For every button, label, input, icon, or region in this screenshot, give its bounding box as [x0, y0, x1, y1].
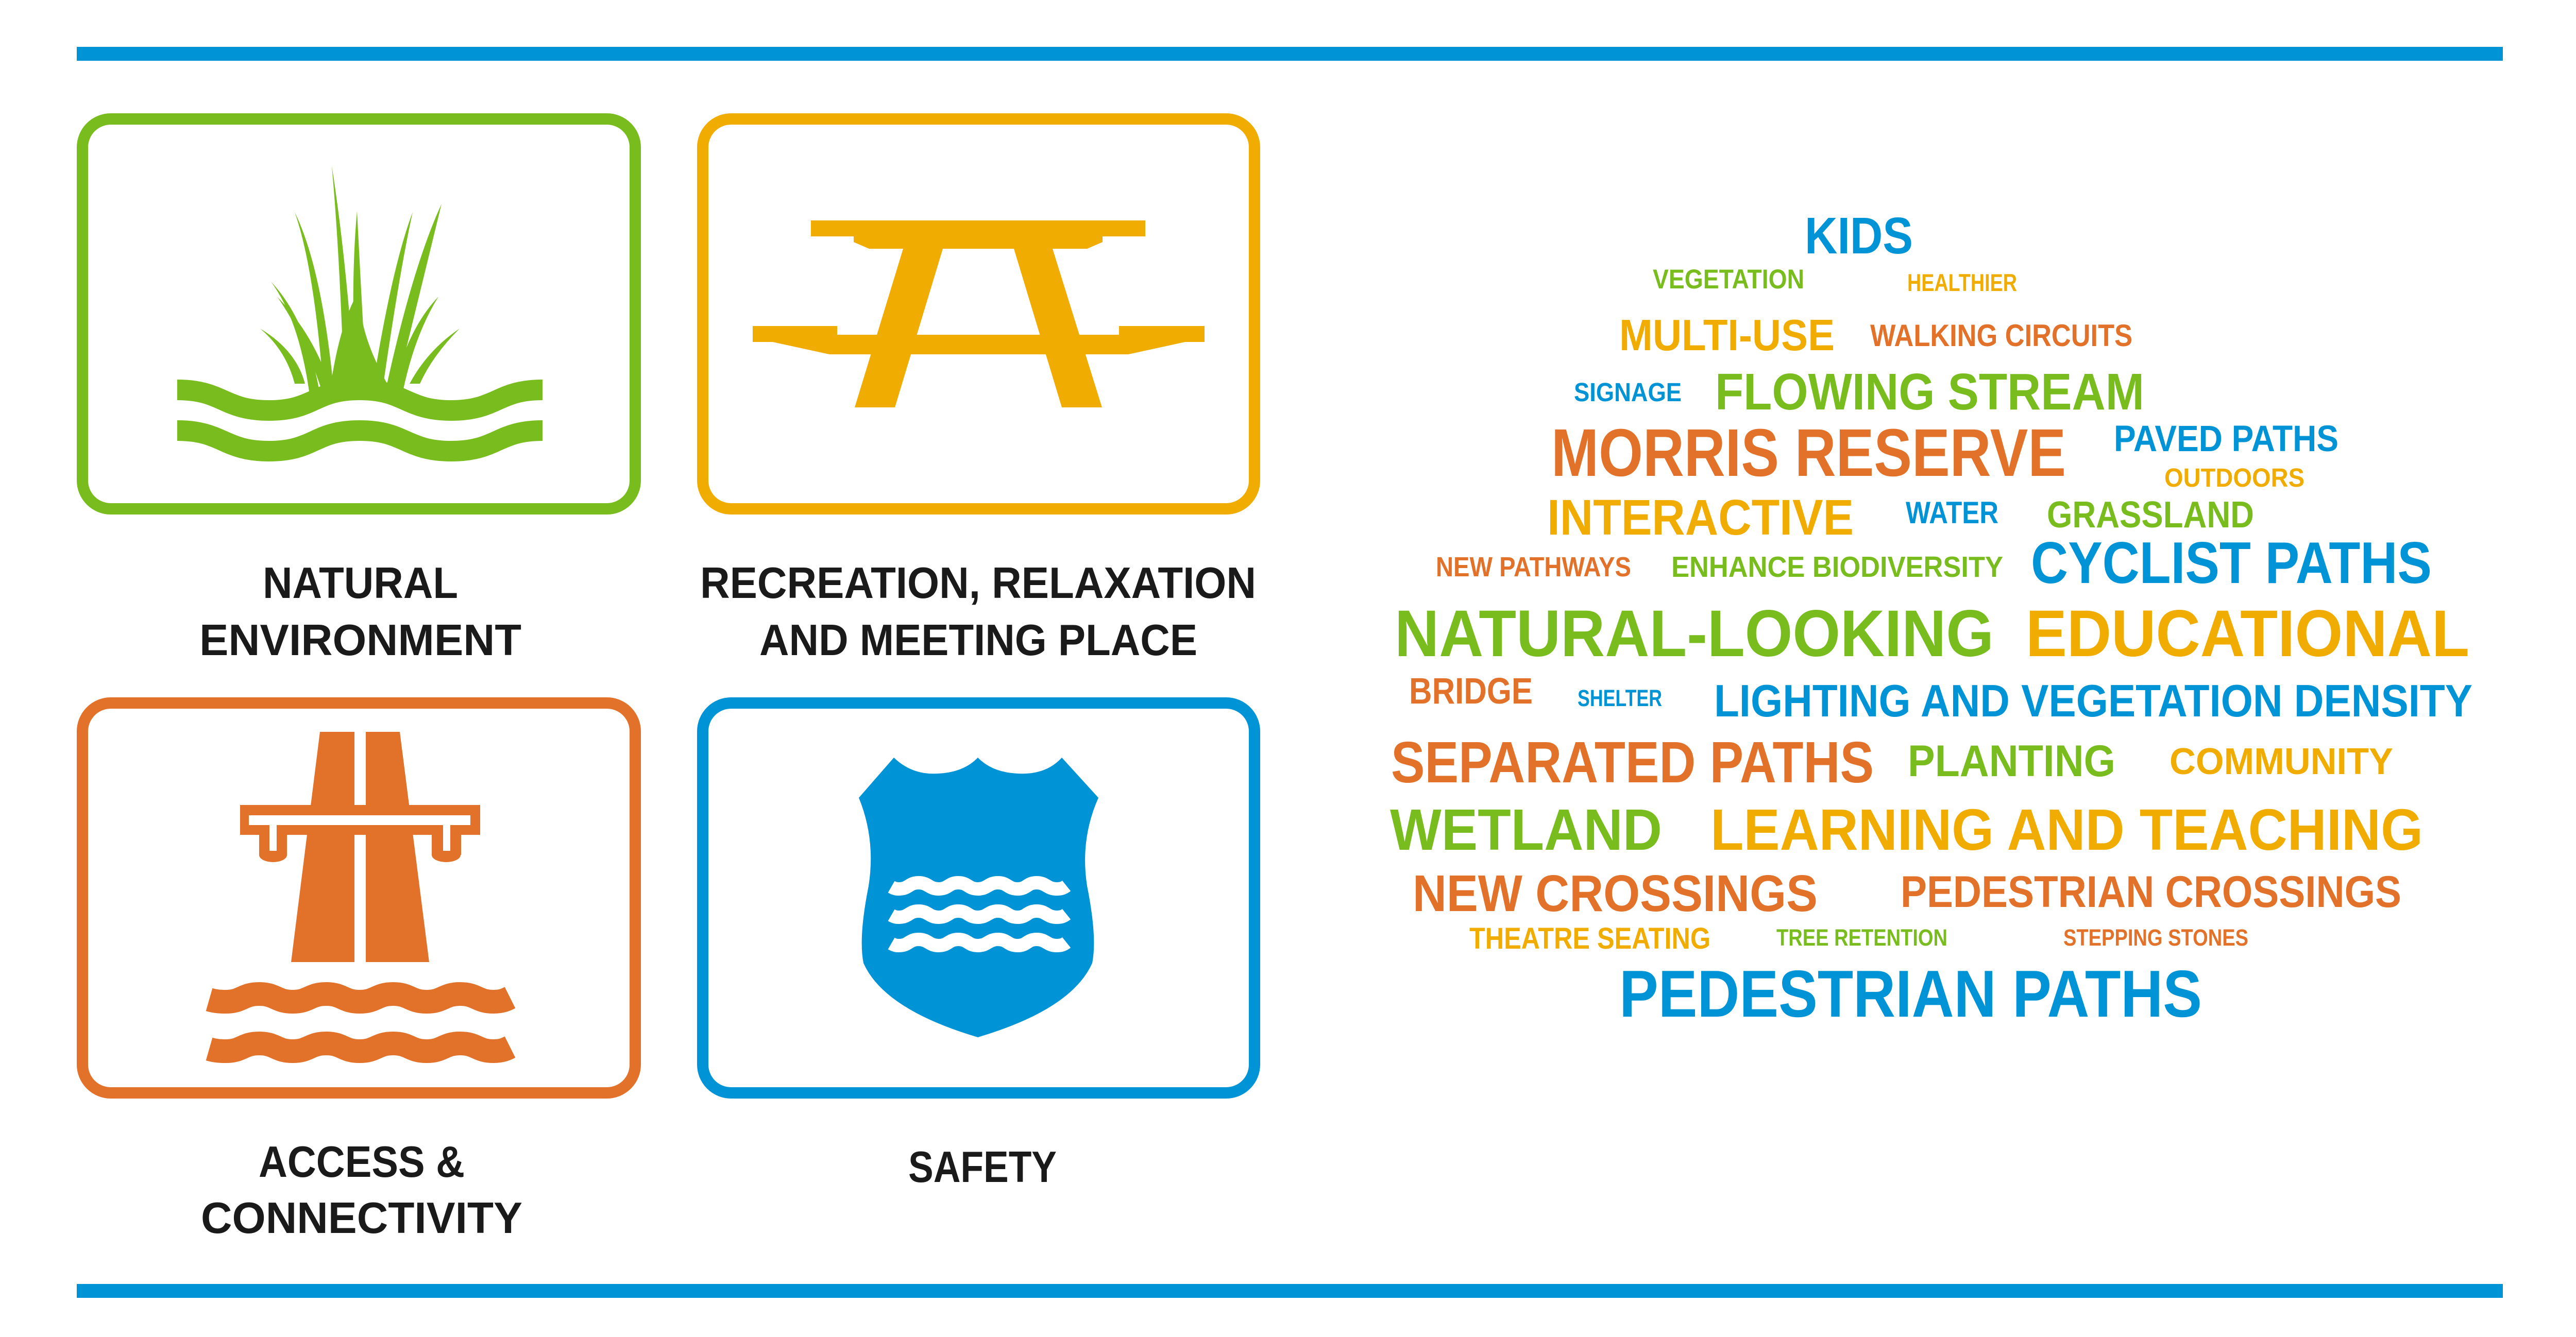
label: recreation: RECREATION, RELAXATION	[700, 559, 1256, 608]
word: walking circuits: WALKING CIRCUITS	[1870, 318, 2132, 353]
word: vegetation: VEGETATION	[1653, 264, 1804, 295]
word: pedestrian crossings: PEDESTRIAN CROSSINGS	[1901, 867, 2401, 917]
panel: access	[82, 703, 635, 1243]
word: wetland: WETLAND	[1390, 797, 1662, 862]
word: signage: SIGNAGE	[1574, 378, 1682, 407]
word: separated paths: SEPARATED PATHS	[1391, 730, 1874, 795]
word: tree retention: TREE RETENTION	[1776, 924, 1947, 951]
label: recreation: AND MEETING PLACE	[759, 616, 1197, 665]
word: pedestrian paths: PEDESTRIAN PATHS	[1619, 957, 2202, 1031]
label: natural environment	[199, 559, 521, 665]
icon: picnic table	[753, 220, 1205, 407]
word: lighting and vegetation density: LIGHTING AND VEGETATION DENSITY	[1714, 675, 2472, 726]
word: enhance biodiversity: ENHANCE BIODIVERSITY	[1671, 551, 2003, 584]
label: access	[201, 1138, 522, 1243]
box: yellow frame	[703, 119, 1255, 509]
top rule	[77, 47, 2503, 61]
word: multi-use: MULTI-USE	[1619, 311, 1835, 360]
word: kids: KIDS	[1805, 207, 1913, 265]
word: theatre seating: THEATRE SEATING	[1469, 922, 1710, 955]
word: cyclist paths: CYCLIST PATHS	[2031, 530, 2432, 596]
word: educational: EDUCATIONAL	[2026, 597, 2469, 671]
icon: grass and water	[177, 166, 543, 451]
word: healthier: HEALTHIER	[1907, 269, 2017, 296]
word: community: COMMUNITY	[2170, 741, 2393, 782]
panel: safety	[703, 703, 1255, 1192]
panel: natural environment	[82, 119, 635, 665]
icon: shield with waves	[859, 758, 1098, 1037]
box: orange frame	[82, 703, 635, 1093]
label: natural environment: NATURAL	[263, 559, 458, 608]
label: access: ACCESS &	[259, 1138, 465, 1187]
panel: recreation	[700, 119, 1256, 665]
box: blue frame	[703, 703, 1255, 1093]
word: planting: PLANTING	[1908, 736, 2115, 786]
bottom rule	[77, 1284, 2503, 1298]
word: outdoors: OUTDOORS	[2164, 463, 2304, 492]
word: interactive: INTERACTIVE	[1547, 489, 1854, 545]
word: natural-looking: NATURAL-LOOKING	[1395, 597, 1994, 671]
word: water: WATER	[1906, 495, 1998, 530]
icon: highway bridge over water	[209, 732, 510, 1051]
box: green frame	[82, 119, 635, 509]
word: grassland: GRASSLAND	[2047, 494, 2254, 536]
word: learning and teaching: LEARNING AND TEACHING	[1710, 797, 2423, 862]
word: bridge: BRIDGE	[1409, 671, 1533, 712]
word: morris reserve: MORRIS RESERVE	[1551, 415, 2066, 490]
label: safety: SAFETY	[908, 1143, 1057, 1192]
word: new pathways: NEW PATHWAYS	[1436, 552, 1631, 582]
label: recreation	[700, 559, 1256, 665]
label: natural environment: ENVIRONMENT	[199, 616, 521, 665]
word: paved paths: PAVED PATHS	[2114, 419, 2338, 459]
word: stepping stones: STEPPING STONES	[2063, 924, 2248, 951]
word: new crossings: NEW CROSSINGS	[1413, 865, 1818, 922]
word cloud	[1390, 207, 2472, 1031]
label: access: CONNECTIVITY	[201, 1194, 522, 1243]
word: shelter: SHELTER	[1578, 685, 1662, 711]
word: flowing stream: FLOWING STREAM	[1715, 363, 2144, 421]
